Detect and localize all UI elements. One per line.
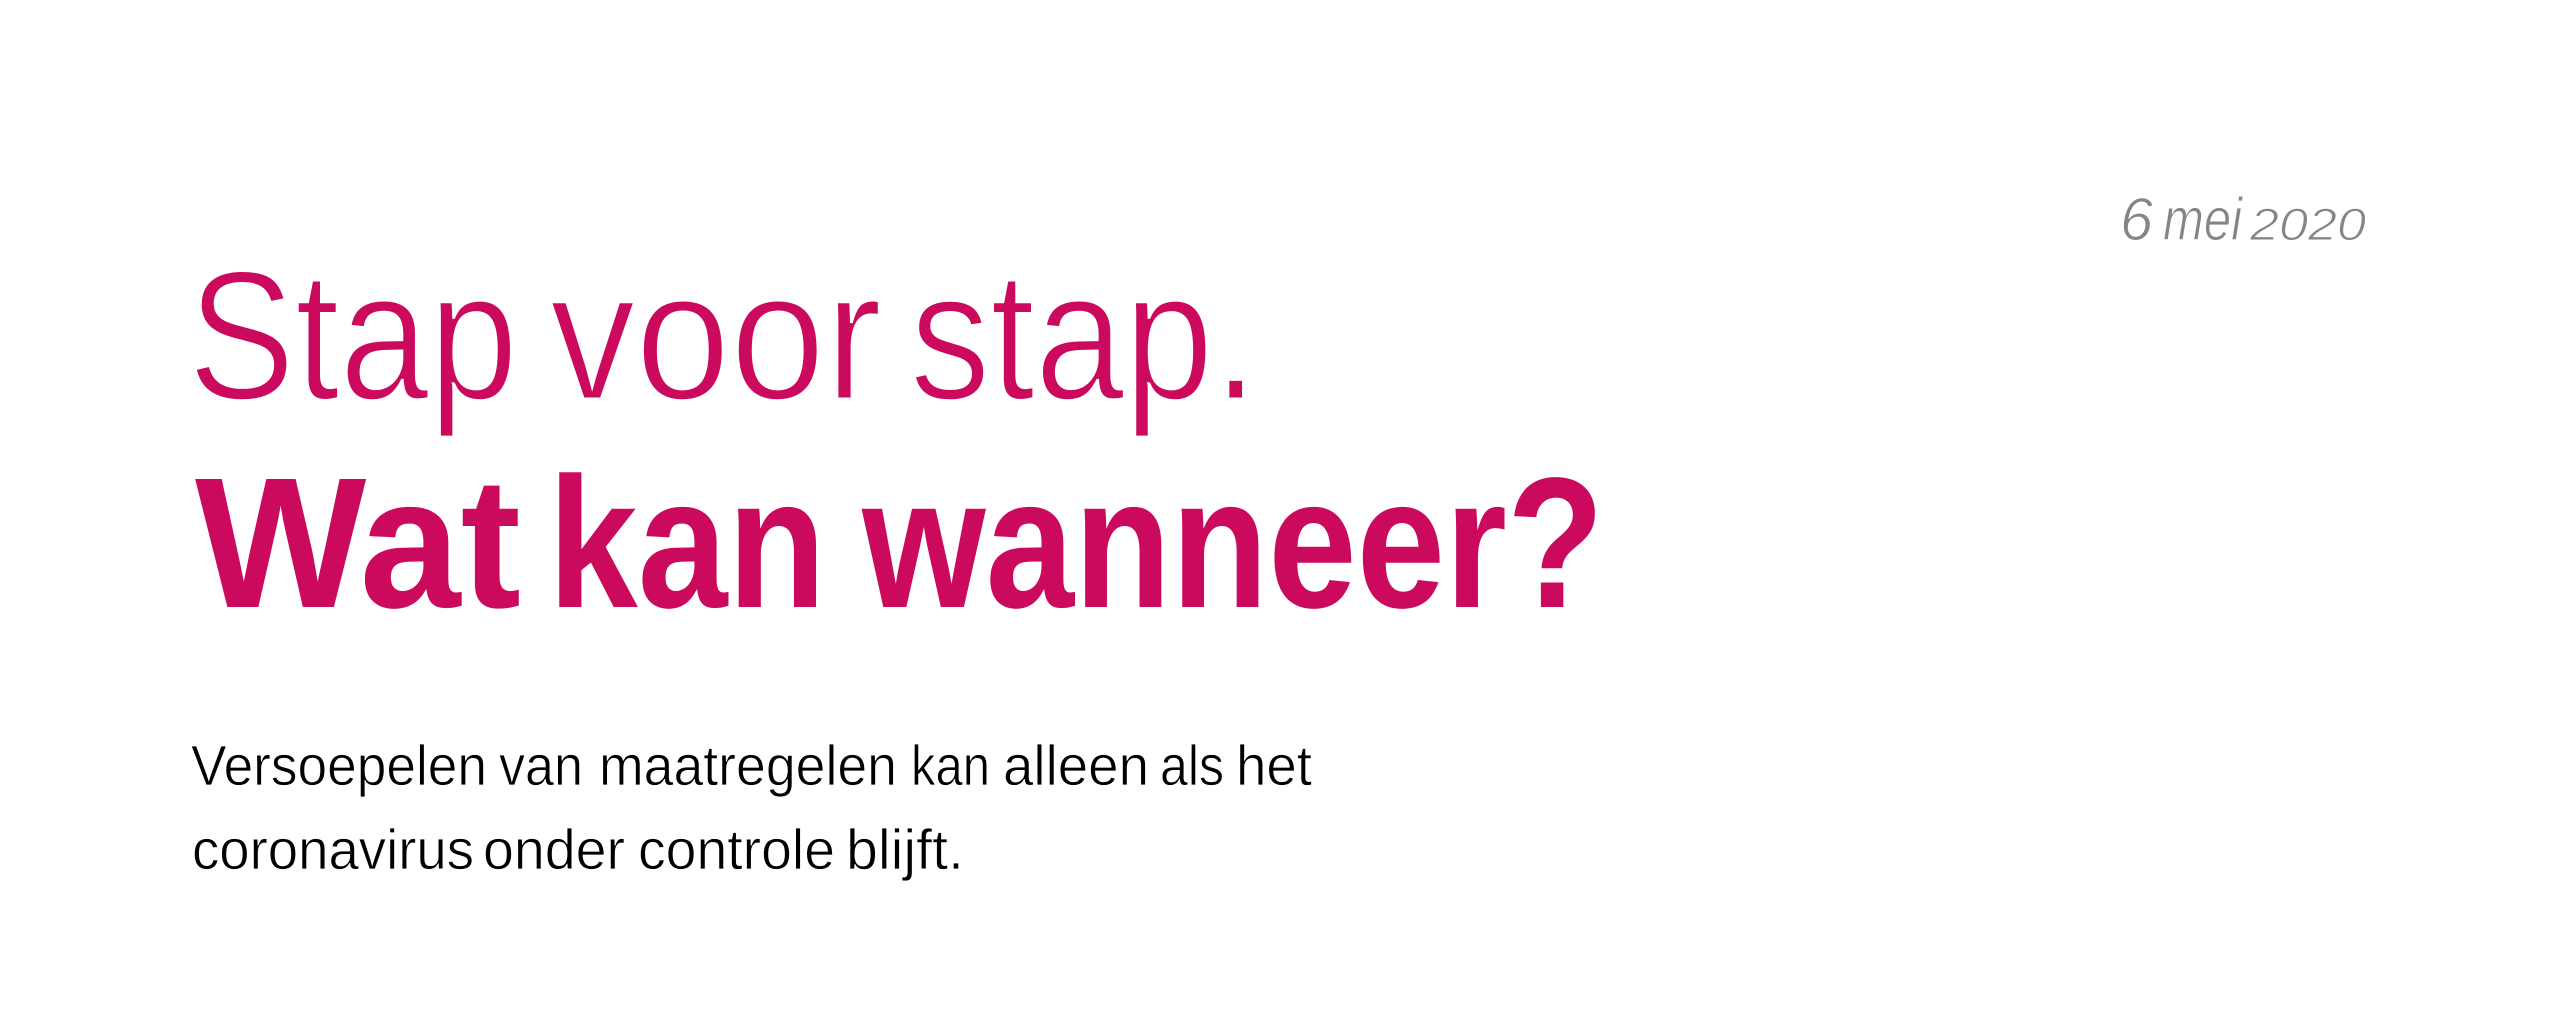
intro line 1: het <box>1236 734 1312 798</box>
intro line 1: kan <box>911 734 990 798</box>
title line 2: kan <box>548 440 826 647</box>
intro line 2: onder <box>483 818 625 882</box>
date: mei <box>2163 186 2243 253</box>
intro line 1: van <box>499 734 583 798</box>
title line 2: wanneer? <box>861 440 1604 647</box>
title line 2: Wat <box>195 440 521 647</box>
title line 1: voor <box>550 232 882 438</box>
date: 2020 <box>2249 199 2366 250</box>
intro line 1: Versoepelen <box>191 734 487 798</box>
intro line 1: als <box>1160 734 1224 798</box>
date: 6 <box>2120 186 2154 253</box>
intro line 2: blijft. <box>846 818 964 882</box>
intro line 2: controle <box>638 818 835 882</box>
title line 1: Stap <box>188 232 518 438</box>
intro line 2: coronavirus <box>192 818 474 882</box>
title line 1: stap. <box>910 232 1258 438</box>
intro text <box>191 734 1312 882</box>
intro line 1: maatregelen <box>599 734 897 798</box>
intro line 1: alleen <box>1003 734 1149 798</box>
